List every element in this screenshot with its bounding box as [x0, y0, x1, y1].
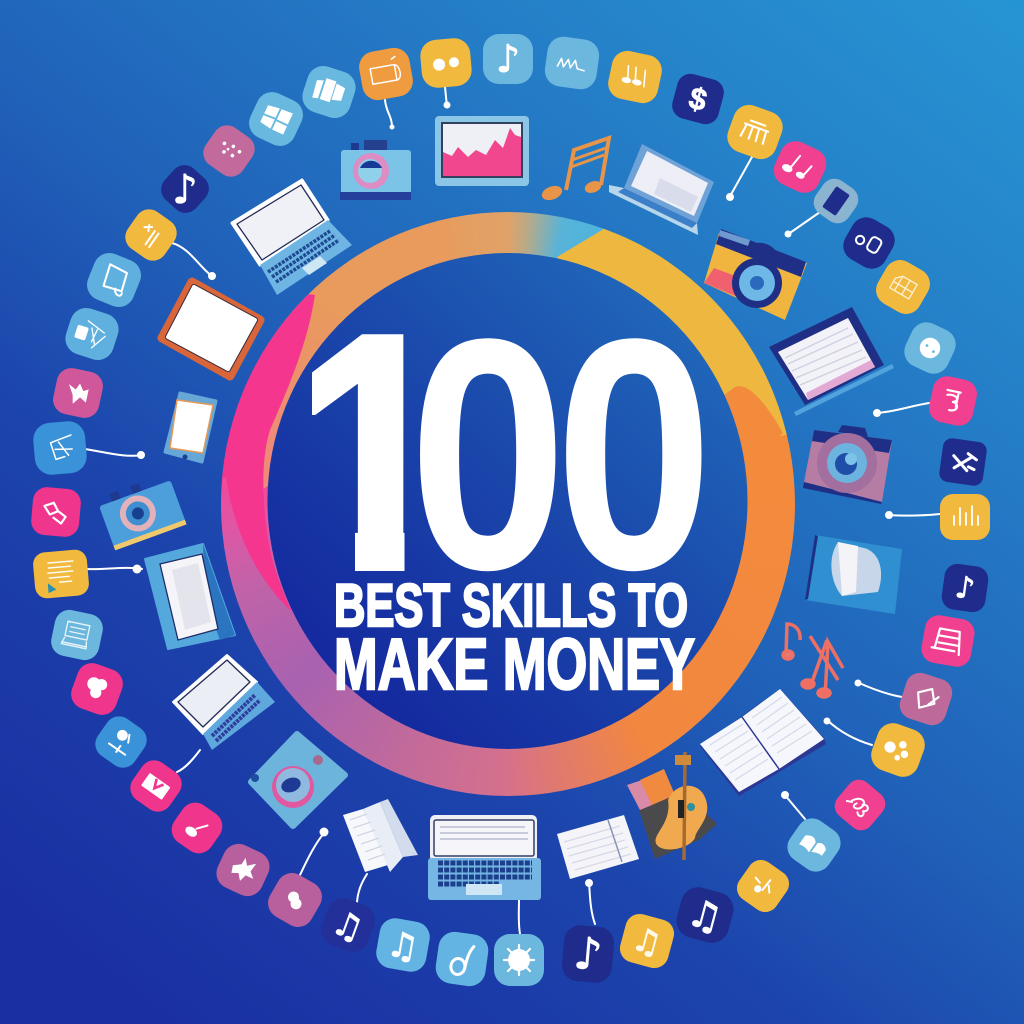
- icon: paper sheet: [557, 815, 639, 879]
- tile: yellow double note: [617, 911, 677, 971]
- tile: pink glasses: [30, 486, 82, 538]
- tile: pink printer: [919, 613, 977, 669]
- tile: navy note squircle: [155, 159, 215, 219]
- icon: yellow camera: [704, 229, 807, 320]
- icon: left laptop: [173, 655, 275, 750]
- tile: yellow grid: [870, 254, 936, 320]
- tile: pink ornament: [830, 775, 890, 835]
- tile: pink glyph: [926, 374, 980, 428]
- central gradient ring: [221, 212, 795, 796]
- tile: mauve heart: [262, 867, 328, 933]
- icon: laptop top left: [232, 180, 352, 295]
- icon: salmon music notes: [783, 624, 843, 697]
- tile: yellow blossoms: [867, 719, 929, 781]
- tile: yellow notes sheet: [32, 549, 90, 599]
- tile: navy note squircle: ♪: [172, 167, 198, 213]
- tile: pink notes: [769, 136, 831, 198]
- tile: yellow double note: ♫: [628, 919, 666, 963]
- tile: light blue book: [781, 812, 847, 878]
- tile: navy double note left: [317, 894, 379, 956]
- icon: laptop top right: [609, 144, 714, 235]
- tile: navy dollar: $: [685, 81, 711, 118]
- icon: orange music note: [541, 138, 609, 202]
- tile: light blue splash: [494, 934, 544, 986]
- icon: open book: [700, 689, 826, 796]
- tile: navy double note left: ♫: [327, 902, 369, 949]
- tile: mauve dots: [198, 120, 260, 182]
- tile: pink folder: [125, 755, 187, 817]
- tile: grey blue phone: [808, 173, 864, 229]
- tile: navy single note: ♪: [572, 928, 604, 981]
- tile: navy double note: [673, 883, 737, 947]
- tile: light blue double note: ♫: [384, 924, 422, 969]
- icon: phone: [165, 393, 216, 462]
- connector lines: [85, 87, 940, 934]
- icon: mauve camera: [803, 425, 892, 504]
- tile: light blue double note: [374, 916, 432, 974]
- tile: navy dollar: [669, 71, 727, 127]
- tile: navy note: ♪: [953, 570, 977, 607]
- icon: bottom laptop: [428, 815, 541, 900]
- title number 100: 1: [294, 264, 454, 643]
- tile: light blue note: [483, 34, 533, 84]
- tile: light blue score: [61, 304, 123, 364]
- title number 100: 0: [555, 272, 713, 639]
- tile: yellow instruments: [605, 48, 665, 106]
- tile: yellow fragments: [732, 855, 794, 917]
- tile: light blue waves: [543, 35, 601, 91]
- device icons inner ring: [96, 116, 902, 900]
- tile: light blue note: ♪: [496, 37, 520, 81]
- tile: yellow dots: [419, 37, 473, 89]
- subtitle line two: MAKE MONEY: [334, 625, 695, 705]
- tile: light blue window: [244, 87, 308, 151]
- icon: left camera: [96, 473, 187, 550]
- icon: instant camera: [251, 734, 345, 826]
- tile: navy single note: [561, 924, 615, 984]
- tile: navy glyph: [838, 212, 900, 274]
- icon: guitar with swatches: [627, 752, 717, 860]
- tile: light blue half note: [434, 930, 490, 988]
- tile: blue bird: [90, 711, 152, 773]
- tile: light blue paper: [82, 248, 146, 312]
- icon: folded paper: [343, 799, 418, 872]
- tile: pink blossom: [67, 659, 127, 719]
- tile: navy note: [940, 562, 990, 614]
- tile: navy dancer: [938, 437, 988, 487]
- tile: light blue cards: [298, 62, 360, 122]
- icon: navy laptop right: [769, 307, 894, 416]
- tile: light blue screen: [48, 607, 106, 663]
- tile: navy double note: ♫: [683, 890, 727, 941]
- tile: mauve sketch: [896, 669, 956, 729]
- title number 100: 0: [409, 272, 567, 639]
- tile: yellow bars: [940, 494, 990, 540]
- tile: pink fruit: [166, 797, 228, 859]
- icon: blue book: [145, 544, 235, 649]
- tile: yellow rotate: [120, 204, 182, 266]
- title number 100: [312, 334, 702, 572]
- icon: blue camera top: [340, 140, 411, 200]
- tile: yellow chart glyph: [723, 100, 787, 164]
- icon: chart monitor: [435, 116, 529, 186]
- tile: mauve dancer: [50, 365, 106, 421]
- subtitle line one: BEST SKILLS TO: [334, 572, 688, 639]
- icon: tablet: [162, 282, 260, 376]
- icon: blue book card: [805, 535, 902, 614]
- tile: orange card: [357, 45, 415, 103]
- tile: mauve flower: [211, 839, 275, 901]
- tile: blue doodle: [32, 420, 88, 476]
- tile: light blue face: [899, 317, 961, 379]
